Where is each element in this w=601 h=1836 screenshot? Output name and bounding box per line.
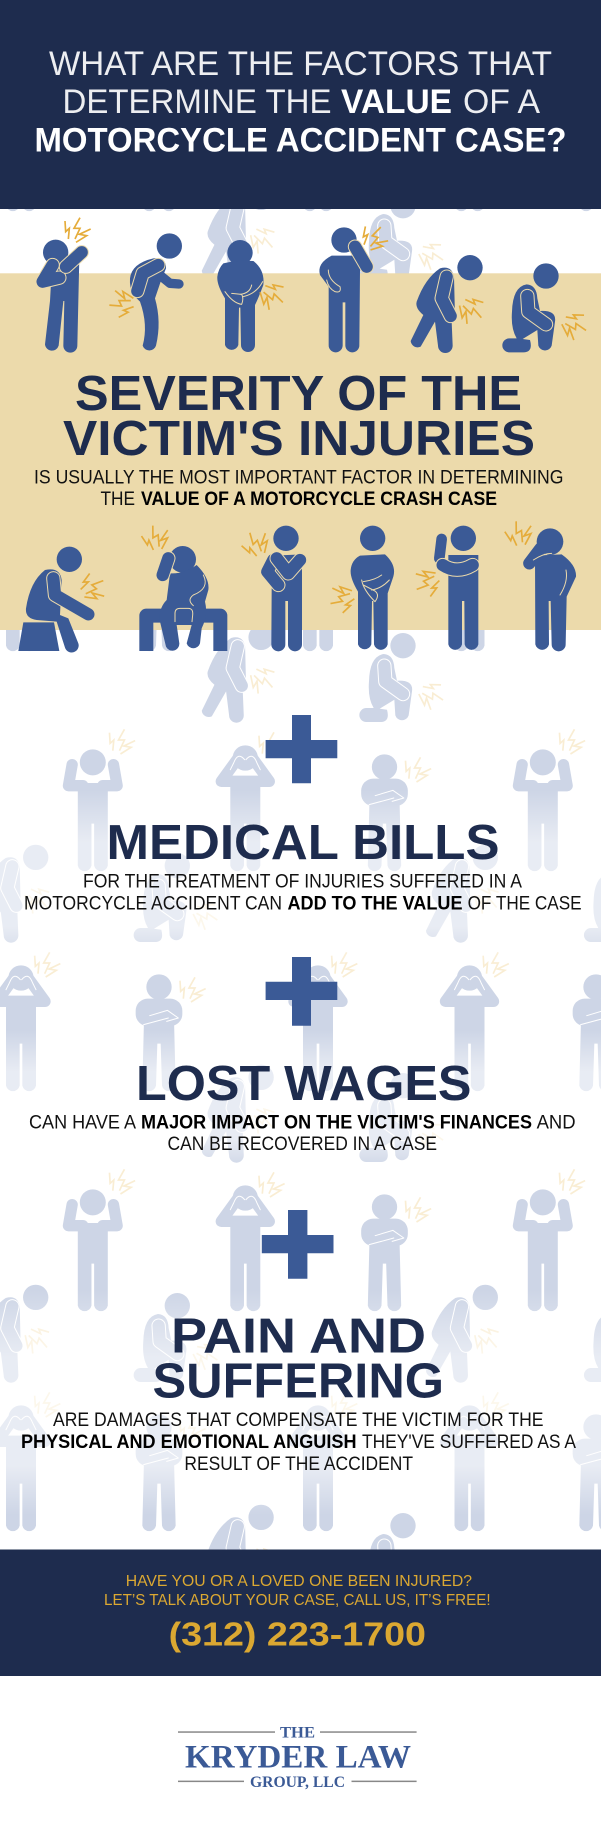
- text: medical bills description: MOTORCYCLE ACCIDENT CAN: [24, 893, 282, 914]
- heading: lost wages: LOST WAGES: [136, 1057, 472, 1111]
- text: medical bills description: ADD TO THE VALUE: [288, 893, 462, 914]
- text: medical bills description: FOR THE TREATMENT OF INJURIES SUFFERED IN A: [83, 871, 522, 892]
- text: pain and suffering description: ARE DAMAGES THAT COMPENSATE THE VICTIM FOR THE: [53, 1410, 544, 1431]
- panel: severity of injuries band: [0, 273, 601, 630]
- call to action text: LET’S TALK ABOUT YOUR CASE, CALL US, IT’S FREE!: [104, 1592, 491, 1609]
- heading: severity of the victim's injuries: SEVERITY OF THE: [75, 367, 522, 421]
- text: lost wages description: CAN BE RECOVERED IN A CASE: [168, 1134, 437, 1155]
- icon: plus 1: [266, 715, 337, 783]
- logo: the kryder law group: THE: [280, 1725, 315, 1742]
- panel: call to action: [0, 1550, 601, 1676]
- logo: the kryder law group: [178, 1725, 417, 1791]
- text: lost wages description: [29, 1112, 576, 1155]
- icon: plus 2: [266, 957, 337, 1026]
- text: lost wages description: AND: [537, 1112, 576, 1133]
- top row of injured figures: [43, 218, 587, 353]
- title: [34, 45, 566, 160]
- text: medical bills description: OF THE CASE: [468, 893, 582, 914]
- text: pain and suffering description: PHYSICAL AND EMOTIONAL ANGUISH: [21, 1432, 356, 1453]
- icon: plus 3: [262, 1210, 334, 1279]
- text: pain and suffering description: [21, 1410, 576, 1475]
- call to action text: [104, 1573, 491, 1609]
- text: pain and suffering description: RESULT OF THE ACCIDENT: [184, 1454, 413, 1475]
- heading: medical bills: MEDICAL BILLS: [106, 816, 499, 870]
- title: WHAT ARE THE FACTORS THAT: [49, 45, 552, 83]
- title: MOTORCYCLE ACCIDENT CASE?: [34, 122, 566, 160]
- text: lost wages description: MAJOR IMPACT ON THE VICTIM'S FINANCES: [141, 1112, 532, 1133]
- title: OF A: [463, 83, 540, 121]
- heading: pain and suffering: SUFFERING: [152, 1355, 444, 1409]
- bottom row of injured figures: [18, 516, 576, 653]
- text: pain and suffering description: THEY'VE SUFFERED AS A: [362, 1432, 576, 1453]
- text: severity description: IS USUALLY THE MOST IMPORTANT FACTOR IN DETERMINING: [34, 467, 564, 488]
- heading: severity of the victim's injuries: VICTIM'S INJURIES: [63, 412, 535, 466]
- title: VALUE: [341, 83, 452, 121]
- logo: the kryder law group: KRYDER LAW: [185, 1740, 411, 1776]
- heading: pain and suffering: PAIN AND: [171, 1309, 426, 1363]
- text: lost wages description: CAN HAVE A: [29, 1112, 136, 1133]
- logo: the kryder law group: GROUP, LLC: [250, 1774, 345, 1791]
- heading: severity of the victim's injuries: [63, 367, 535, 466]
- call to action text: HAVE YOU OR A LOVED ONE BEEN INJURED?: [126, 1573, 472, 1590]
- text: severity description: THE: [100, 489, 135, 510]
- text: severity description: [34, 467, 564, 510]
- title: DETERMINE THE: [62, 83, 332, 121]
- header banner: [0, 0, 601, 209]
- text: severity description: VALUE OF A MOTORCYCLE CRASH CASE: [141, 489, 497, 510]
- text: medical bills description: [24, 871, 582, 914]
- phone number: (312) 223-1700: [169, 1615, 426, 1652]
- heading: pain and suffering: [152, 1309, 444, 1409]
